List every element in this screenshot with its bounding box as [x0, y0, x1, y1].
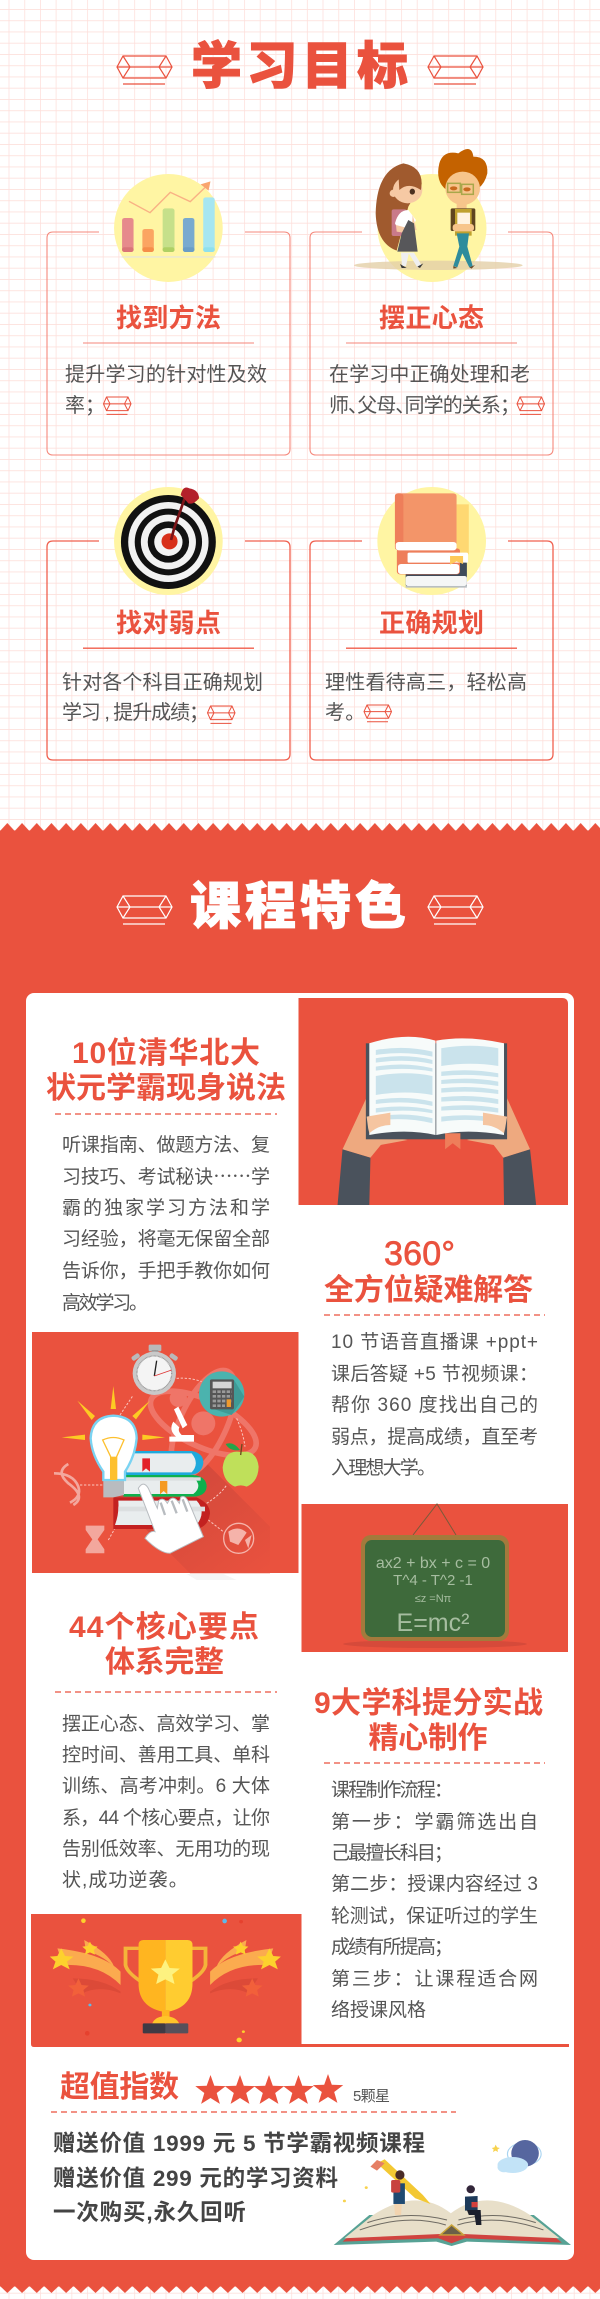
heading: 找对弱点 [116, 608, 221, 638]
body text [62, 1134, 270, 1314]
body text: 理性看待高三，轻松高 [325, 671, 527, 694]
heading: 超值指数 [60, 2071, 179, 2104]
white feature panel [26, 993, 574, 2260]
body text: 霸的独家学习方法和学 [62, 1197, 270, 1219]
body text: 摆正心态、高效学习、掌 [62, 1713, 270, 1735]
body text: 告别低效率、无用功的现 [62, 1838, 270, 1860]
formulas: ≤z =Nπ [415, 1593, 452, 1605]
dots [81, 1918, 86, 1923]
body text [65, 363, 267, 417]
body text: 第一步：学霸筛选出自 [331, 1811, 538, 1833]
body text [331, 1779, 538, 2021]
inline ornament [104, 397, 131, 414]
hourglass [86, 1526, 104, 1553]
body text: 成绩有所提高； [331, 1936, 453, 1958]
body text: 告诉你，手把手教你如何 [62, 1260, 270, 1282]
body text: 课后答疑 +5 节视频课： [331, 1363, 538, 1385]
body text: 听课指南、做题方法、复 [62, 1134, 270, 1156]
books [113, 1497, 210, 1529]
long shadow [113, 1460, 270, 1573]
streamers [50, 1940, 121, 1997]
inline ornament [364, 705, 392, 722]
title: course features [117, 878, 483, 935]
heading: 44个核心要点 [69, 1611, 259, 1644]
bulb [91, 1416, 137, 1480]
panel: find method [47, 174, 290, 455]
inline ornament [517, 397, 544, 414]
heading [314, 1687, 543, 1755]
heading: 精心制作 [368, 1722, 488, 1755]
heading: 360° [384, 1235, 455, 1273]
rays [62, 1386, 165, 1440]
heading: 状元学霸现身说法 [46, 1072, 286, 1105]
image: blackboard with formulas [302, 1504, 568, 1652]
body text [325, 671, 527, 724]
apple [223, 1452, 259, 1487]
heading: 全方位疑难解答 [324, 1273, 533, 1307]
formulas: ax2 + bx + c = 0 [376, 1555, 490, 1572]
calculator [199, 1371, 244, 1417]
body text: 考。 [325, 701, 355, 724]
cup [126, 1948, 206, 1985]
body text: 率； [65, 394, 95, 417]
hand [138, 1484, 203, 1553]
heading: 9大学科提分实战 [314, 1687, 543, 1720]
faint DNA [54, 1464, 79, 1505]
formulas: E=mc² [397, 1609, 469, 1637]
body text: 习技巧、考试秘诀⋯⋯学 [62, 1166, 270, 1188]
heading: 找到方法 [116, 303, 221, 333]
heading text: 课程特色 [190, 878, 406, 935]
icon: two students [354, 149, 523, 282]
feature: value index [51, 2071, 456, 2225]
ornament left [117, 56, 172, 84]
feature: 44 key points [55, 1611, 277, 1891]
heading [324, 1235, 533, 1307]
heading text: 学习目标 [191, 38, 408, 95]
microscope [169, 1407, 194, 1442]
body text: 控时间、善用工具、单科 [62, 1744, 270, 1766]
body text: 训练、高考冲刺。6 大体 [62, 1775, 270, 1797]
offer list: 赠送价值 1999 元 5 节学霸视频课程 [53, 2131, 425, 2156]
feature: 360 degree answers [324, 1235, 545, 1479]
body text: 学习 , 提升成绩； [62, 701, 199, 724]
body text: 第三步：让课程适合网 [331, 1968, 538, 1990]
illustration: students on open book [334, 2140, 571, 2246]
heading [46, 1036, 286, 1105]
offer list: 赠送价值 299 元的学习资料 [53, 2166, 338, 2191]
ornament right [428, 56, 483, 84]
body text: 系，44 个核心要点，让你 [62, 1807, 270, 1829]
body text: 提升学习的针对性及效 [65, 363, 267, 386]
image: trophy with stars [31, 1914, 569, 2047]
ornament right [428, 896, 483, 924]
pencil [377, 2159, 431, 2204]
body text: 针对各个科目正确规划 [62, 671, 263, 694]
body text: 络授课风格 [331, 1999, 426, 2021]
stopwatch [149, 1345, 161, 1351]
body text: 轮测试，保证听过的学生 [331, 1905, 538, 1927]
feature: ten top scholars [46, 1036, 286, 1314]
ornament left [117, 896, 172, 924]
body text: 己最擅长科目； [331, 1842, 453, 1864]
body text: 弱点，提高成绩，直至考 [331, 1426, 538, 1448]
body text [331, 1331, 538, 1479]
heading: 体系完整 [105, 1646, 224, 1679]
inline ornament [208, 706, 235, 723]
body text [329, 363, 530, 417]
heading: 正确规划 [379, 608, 484, 638]
panel: proper planning [310, 487, 553, 760]
body text [62, 1713, 270, 1891]
formulas: T^4 - T^2 -1 [393, 1572, 473, 1589]
icon: book stack [377, 487, 486, 595]
offer list [53, 2131, 425, 2225]
lamp base [103, 1480, 124, 1497]
girl [393, 2183, 405, 2204]
body text [62, 671, 263, 724]
heading: 10位清华北大 [72, 1036, 260, 1070]
panel: right mindset [310, 149, 553, 455]
offer list: 一次购买,永久回听 [53, 2200, 246, 2225]
book [334, 2215, 571, 2246]
body text: 师、父母、同学的关系； [329, 394, 510, 417]
heading [69, 1611, 259, 1679]
moon and cloud [507, 2143, 541, 2165]
dashed connectors [80, 1378, 245, 1540]
body text: 10 节语音直播课 +ppt+ [331, 1331, 538, 1353]
formulas [376, 1555, 490, 1637]
heading: 摆正心态 [379, 303, 484, 333]
body text: 入理想大学。 [331, 1457, 436, 1479]
body text: 课程制作流程： [331, 1779, 453, 1801]
body text: 状,成功逆袭。 [62, 1869, 178, 1891]
icon: dartboard [114, 487, 223, 595]
girl [376, 163, 422, 251]
globe [224, 1523, 254, 1553]
atom [142, 1362, 265, 1485]
body text: 习经验，将毫无保留全部 [62, 1228, 270, 1250]
title: learning goals [117, 38, 483, 95]
five stars rating [195, 2074, 343, 2104]
image: hands holding open book [298, 998, 568, 1205]
body text: 在学习中正确处理和老 [329, 363, 530, 386]
boy [467, 2185, 475, 2193]
body text: 第二步：授课内容经过 3 [331, 1873, 538, 1895]
feature: nine subjects [314, 1687, 545, 2021]
panel: find weak points [47, 487, 290, 760]
rating label: 5颗星 [353, 2088, 390, 2105]
red course features section [0, 823, 600, 2293]
icon: bar chart [114, 174, 223, 282]
image: study icons with bulb and books [32, 1332, 298, 1580]
body text: 高效学习。 [62, 1292, 148, 1314]
boy [438, 149, 487, 190]
body text: 帮你 360 度找出自己的 [331, 1394, 538, 1416]
